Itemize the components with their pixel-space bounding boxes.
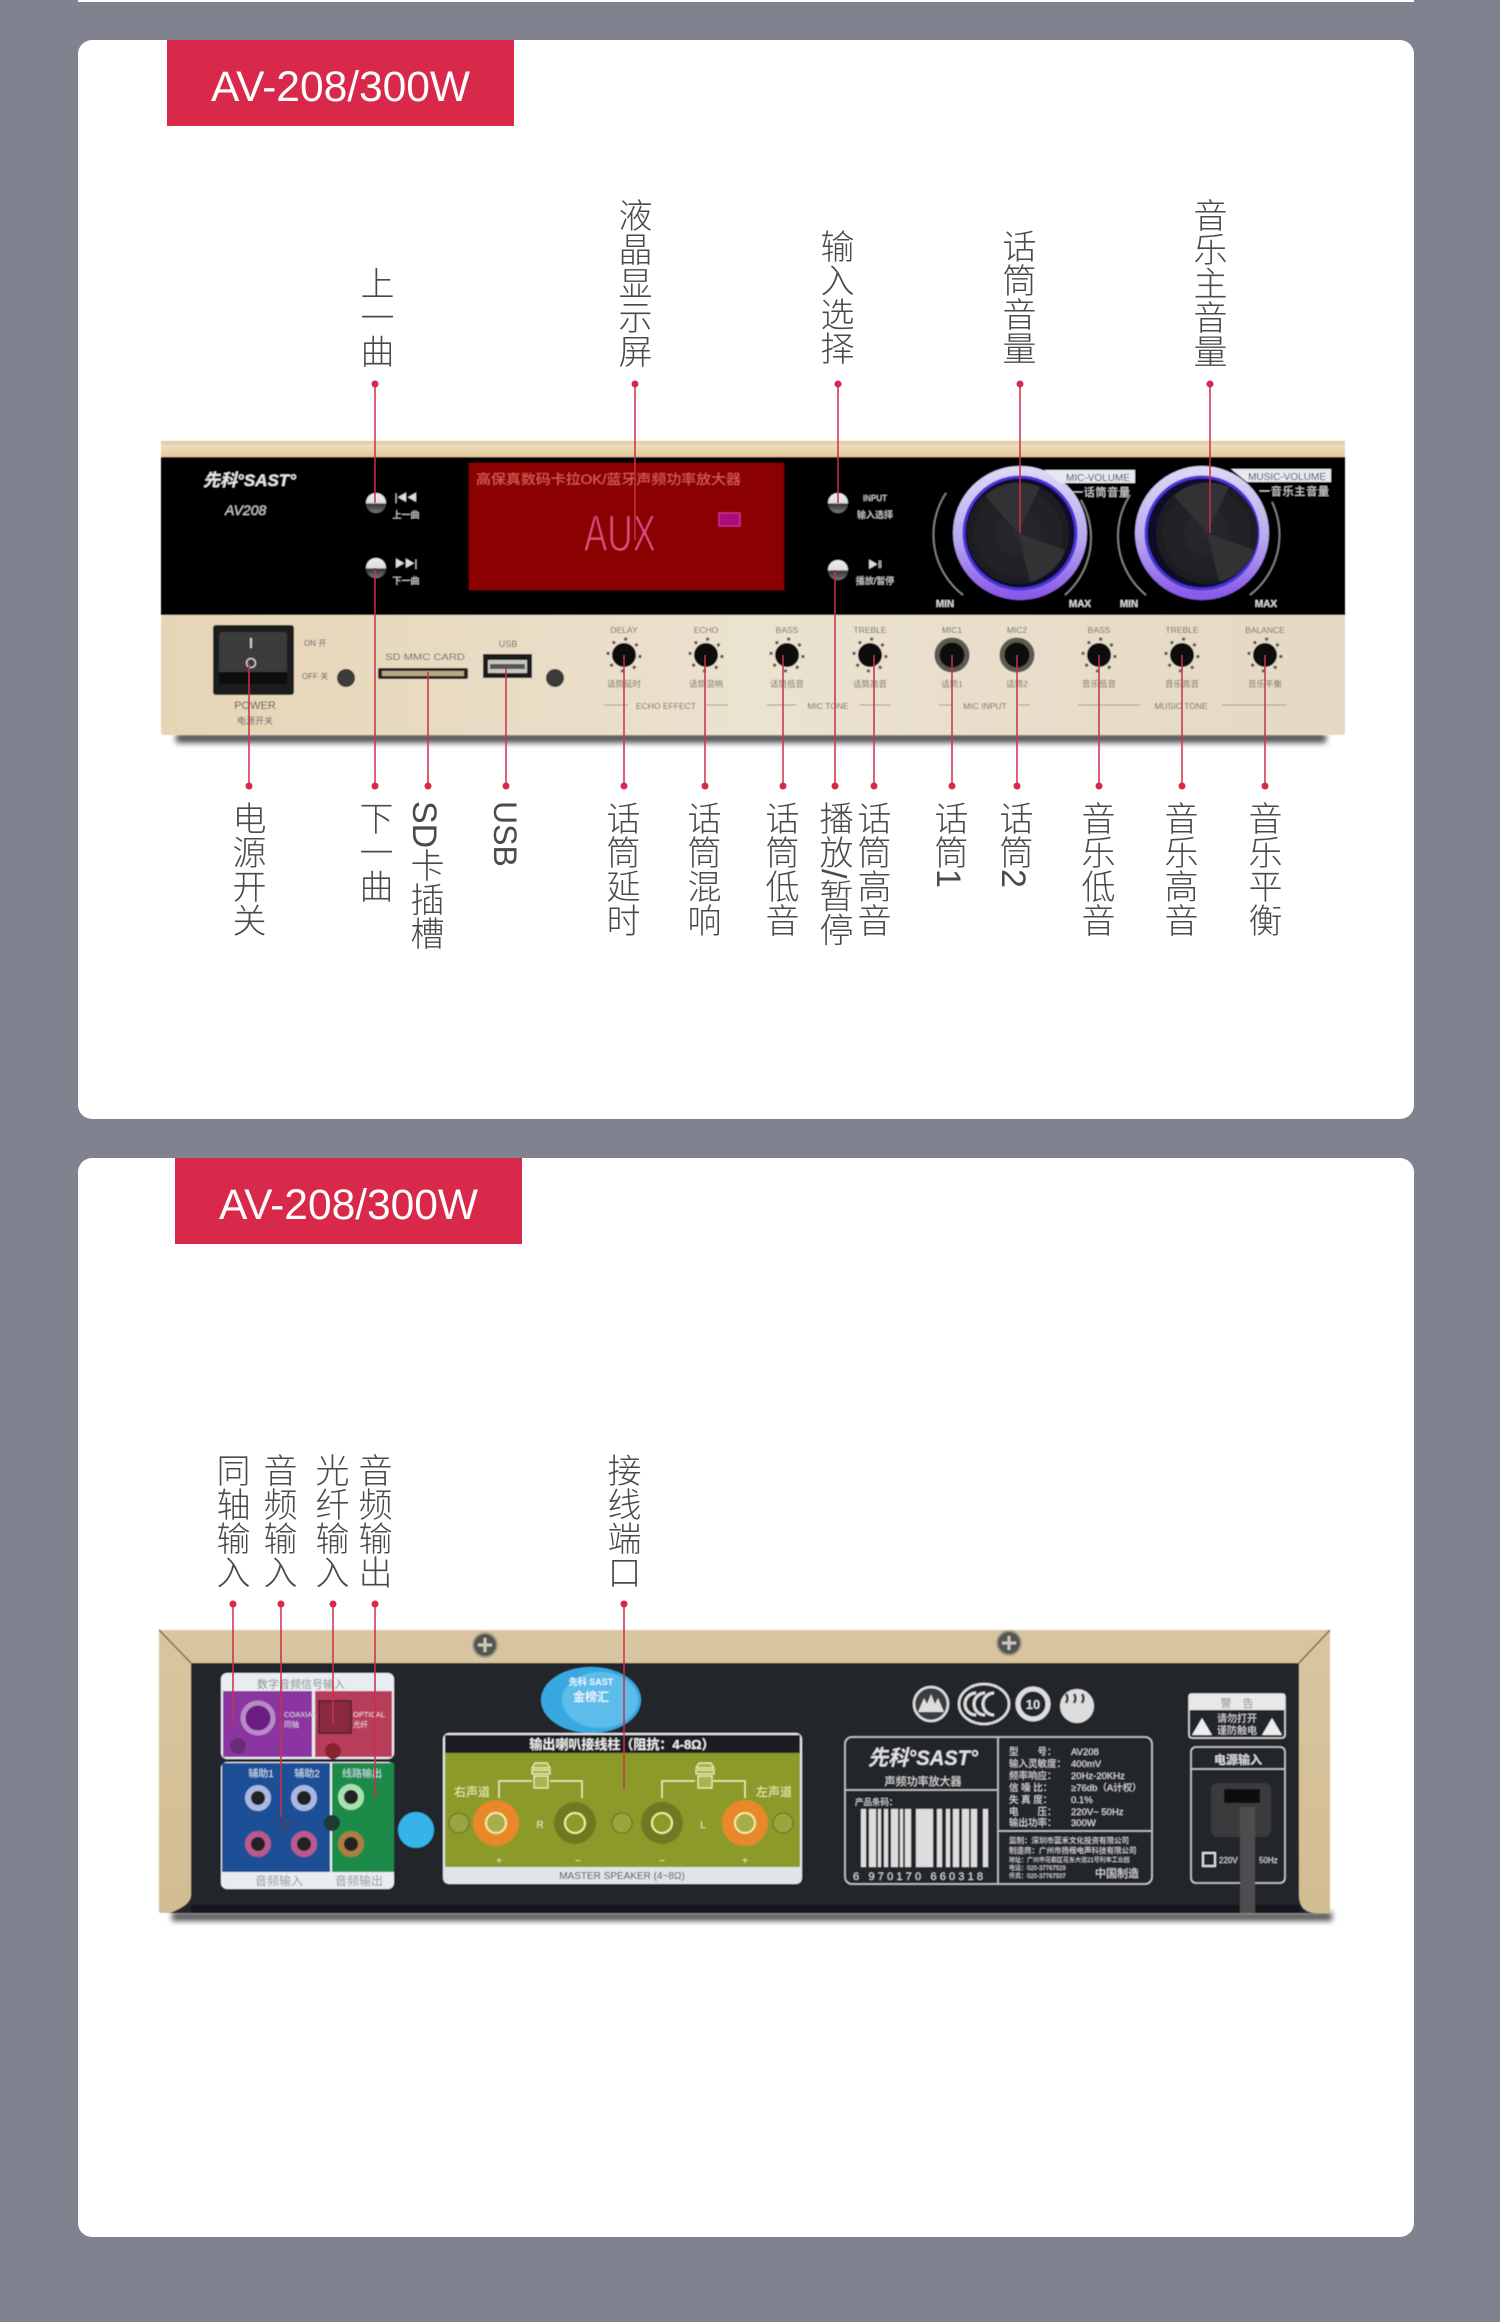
left buttons: ▶▶| bbox=[395, 558, 417, 570]
product label: 型 号： bbox=[1009, 1747, 1057, 1758]
microphone jacks bbox=[937, 640, 1032, 670]
lower gold panel bbox=[161, 615, 1345, 735]
panel legends: DELAY bbox=[610, 625, 638, 635]
music volume knob: MUSIC-VOLUME bbox=[1248, 472, 1326, 483]
power input: 电源输入 bbox=[1214, 1752, 1262, 1767]
leader line: 接线端口 bbox=[620, 1600, 628, 1788]
product label: 信 噪 比： bbox=[1009, 1782, 1052, 1794]
brand logo: 先科°SAST° bbox=[203, 471, 296, 490]
leader line: 音频输入 bbox=[278, 1600, 284, 1817]
leader line: 话筒低音 bbox=[780, 655, 786, 790]
label: USB: USB bbox=[487, 801, 523, 867]
speaker terminal panel: + bbox=[496, 1856, 502, 1867]
leader line: 话筒混响 bbox=[702, 655, 708, 790]
left buttons: 下一曲 bbox=[392, 576, 420, 586]
product label: 中国制造 bbox=[1095, 1866, 1139, 1880]
label: 话筒1: 话筒1 bbox=[929, 801, 967, 888]
panel legends: 话筒1 bbox=[941, 679, 963, 689]
label: 上一曲: 上一曲 bbox=[355, 266, 393, 368]
warning label: 请勿打开 bbox=[1217, 1712, 1257, 1725]
leader line: 音乐平衡 bbox=[1262, 655, 1268, 790]
case screws bbox=[473, 1631, 1021, 1657]
panel legends bbox=[607, 625, 1285, 711]
panel legends: 音乐平衡 bbox=[1248, 679, 1282, 689]
speaker terminal panel: L bbox=[700, 1820, 706, 1831]
product label: AV208 bbox=[1071, 1747, 1099, 1758]
LCD display: 高保真数码卡拉OK/蓝牙声频功率放大器 bbox=[476, 471, 742, 487]
label: 播放/暂停: 播放/暂停 bbox=[814, 801, 852, 946]
product label: 300W bbox=[1071, 1818, 1096, 1829]
power switch bbox=[213, 625, 355, 726]
rear shadow bbox=[172, 1912, 1332, 1921]
product label: 制造商：广州市扬程电声科技有限公司 bbox=[1009, 1845, 1136, 1855]
product label: 失 真 度： bbox=[1009, 1794, 1052, 1806]
panel legends: MIC INPUT bbox=[963, 701, 1007, 711]
power switch: POWER bbox=[234, 700, 276, 712]
tone knobs bbox=[608, 639, 1281, 671]
label: 下一曲: 下一曲 bbox=[354, 801, 392, 903]
panel legends: ECHO EFFECT bbox=[636, 701, 696, 711]
left buttons: 上一曲 bbox=[392, 510, 420, 520]
black fascia bbox=[161, 457, 1345, 615]
product label: 220V~ 50Hz bbox=[1071, 1807, 1124, 1818]
product label bbox=[845, 1737, 1152, 1884]
warning label bbox=[1189, 1694, 1285, 1738]
left buttons: 播放/暂停 bbox=[856, 575, 894, 586]
panel legends: MUSIC TONE bbox=[1154, 701, 1208, 711]
product label: 产品条码： bbox=[855, 1797, 898, 1807]
power switch: 电源开关 bbox=[237, 715, 273, 726]
warning label: 谨防触电 bbox=[1217, 1724, 1257, 1737]
leader line: 话筒延时 bbox=[620, 655, 628, 790]
panel: rear view card bbox=[78, 1158, 1414, 2237]
left buttons bbox=[366, 492, 894, 586]
product label: 输入灵敏度： bbox=[1009, 1758, 1066, 1770]
speaker terminal panel: − bbox=[659, 1856, 665, 1867]
label: 同轴输入: 同轴输入 bbox=[211, 1453, 249, 1589]
panel legends: ECHO bbox=[694, 625, 719, 635]
panel: front view card bbox=[78, 40, 1414, 1119]
heading tab: front model: AV-208/300W bbox=[211, 64, 470, 111]
mic volume knob: MAX bbox=[1069, 599, 1091, 610]
leader line: 音乐主音量 bbox=[1206, 380, 1214, 533]
leader line: 音乐低音 bbox=[1096, 655, 1102, 790]
brand logo: AV208 bbox=[224, 502, 266, 518]
audio input output panel: 线路输出 bbox=[342, 1767, 382, 1780]
heading tab: front model bbox=[167, 40, 514, 126]
gold frame bbox=[159, 1630, 1330, 1913]
leader line: 话筒音量 bbox=[1016, 380, 1024, 533]
panel legends: BALANCE bbox=[1245, 625, 1285, 635]
audio input output panel: 辅助1 bbox=[248, 1767, 274, 1780]
heading tab: rear model bbox=[175, 1158, 522, 1244]
digital input panel: OPTICAL bbox=[353, 1710, 385, 1719]
label: 音频输入: 音频输入 bbox=[258, 1453, 296, 1589]
left buttons: |◀◀ bbox=[395, 492, 417, 504]
product label: 声频功率放大器 bbox=[884, 1774, 962, 1788]
cyan seal bbox=[398, 1812, 434, 1848]
label: 音乐高音: 音乐高音 bbox=[1159, 801, 1197, 937]
panel legends: 音乐高音 bbox=[1165, 679, 1199, 689]
panel legends: TREBLE bbox=[853, 625, 887, 635]
certification marks: 10 bbox=[1026, 1697, 1040, 1712]
speaker terminal panel: 左声道 bbox=[756, 1784, 792, 1799]
leader line: 上一曲 bbox=[372, 380, 378, 503]
label: 音乐低音: 音乐低音 bbox=[1076, 801, 1114, 937]
label: 话筒音量: 话筒音量 bbox=[997, 229, 1035, 365]
leader line: 光纤输入 bbox=[330, 1600, 336, 1723]
product label: 地址：广州市花都区花东大道21号利丰工业园 bbox=[1009, 1856, 1130, 1864]
speaker terminal panel: − bbox=[575, 1856, 581, 1867]
left buttons: ▶‖ bbox=[868, 559, 882, 571]
label: 话筒低音: 话筒低音 bbox=[760, 801, 798, 937]
digital input panel: 同轴 bbox=[284, 1719, 299, 1729]
certification marks bbox=[914, 1684, 1094, 1724]
panel legends: 话筒2 bbox=[1006, 679, 1028, 689]
music volume knob: 一音乐主音量 bbox=[1259, 484, 1329, 498]
product label: 0.1% bbox=[1071, 1795, 1093, 1806]
panel legends: 话筒延时 bbox=[607, 679, 641, 689]
SD card slot: SD MMC CARD bbox=[385, 652, 466, 662]
panel legends: BASS bbox=[776, 625, 799, 635]
label: 接线端口: 接线端口 bbox=[602, 1453, 640, 1589]
speaker terminal panel: 输出喇叭接线柱（阻抗：4-8Ω） bbox=[529, 1737, 715, 1752]
warranty sticker: 先科 SAST bbox=[569, 1676, 614, 1687]
product label: 20Hz-20KHz bbox=[1071, 1771, 1125, 1782]
mic volume knob: 一话筒音量 bbox=[1072, 485, 1130, 499]
label: 音乐平衡: 音乐平衡 bbox=[1243, 801, 1281, 937]
brand logo bbox=[203, 471, 296, 518]
product label: 监制：深圳市蓝禾文化投资有限公司 bbox=[1009, 1835, 1129, 1845]
warning label: 警 告 bbox=[1220, 1696, 1254, 1710]
label: 话筒延时: 话筒延时 bbox=[601, 801, 639, 937]
product label: 电 压： bbox=[1009, 1806, 1057, 1818]
label: 输入选择: 输入选择 bbox=[815, 229, 853, 365]
audio input output panel bbox=[221, 1762, 394, 1889]
power input: 220V bbox=[1219, 1856, 1238, 1865]
leader line: 播放/暂停 bbox=[832, 570, 838, 790]
SD card slot bbox=[378, 652, 468, 679]
top gold band bbox=[161, 441, 1345, 457]
leader line: 音乐高音 bbox=[1178, 655, 1186, 790]
USB port bbox=[483, 639, 564, 687]
digital input panel: 数字音频信号输入 bbox=[257, 1677, 345, 1691]
panel legends: MIC TONE bbox=[807, 701, 849, 711]
left buttons: 输入选择 bbox=[857, 509, 893, 520]
digital input panel: COAXIAL bbox=[284, 1710, 317, 1719]
heading tab: rear model: AV-208/300W bbox=[219, 1182, 478, 1229]
label: 话筒混响: 话筒混响 bbox=[682, 801, 720, 937]
label: 电源开关: 电源开关 bbox=[227, 801, 265, 937]
music volume knob: MAX bbox=[1255, 599, 1277, 610]
LCD display bbox=[469, 463, 784, 590]
product label: 频率响应： bbox=[1009, 1770, 1057, 1782]
power switch: ON 开 bbox=[304, 639, 326, 648]
leader line: 话筒1 bbox=[948, 655, 956, 790]
leader line: 音频输出 bbox=[372, 1600, 378, 1798]
mic volume knob bbox=[933, 470, 1135, 610]
previous panel edge bbox=[78, 0, 1414, 2]
leader line: 同轴输入 bbox=[230, 1600, 236, 1725]
label: 液晶显示屏: 液晶显示屏 bbox=[613, 198, 651, 368]
leader line: SD卡插槽 bbox=[424, 672, 432, 790]
speaker terminal panel: 右声道 bbox=[454, 1784, 490, 1799]
label: 音频输出: 音频输出 bbox=[353, 1453, 391, 1589]
product label: 电话：020-37767529 bbox=[1009, 1864, 1066, 1872]
panel legends: BASS bbox=[1088, 625, 1111, 635]
panel legends: 音乐低音 bbox=[1082, 679, 1116, 689]
rear amplifier bbox=[159, 1630, 1332, 1921]
leader line: USB bbox=[502, 668, 510, 790]
product label: 输出功率： bbox=[1009, 1817, 1057, 1829]
USB port: USB bbox=[499, 639, 517, 649]
panel legends: 话筒高音 bbox=[853, 679, 887, 689]
label: 话筒高音: 话筒高音 bbox=[852, 801, 890, 937]
digital input panel: 光纤 bbox=[353, 1719, 368, 1729]
label: SD卡插槽: SD卡插槽 bbox=[405, 801, 443, 950]
label: 光纤输入: 光纤输入 bbox=[310, 1453, 348, 1589]
music volume knob: MIN bbox=[1120, 599, 1138, 610]
audio input output panel: 音频输入 bbox=[255, 1873, 303, 1888]
label: 话筒2: 话筒2 bbox=[994, 801, 1032, 888]
panel legends: 话筒低音 bbox=[770, 679, 804, 689]
LCD display: AUX bbox=[584, 505, 656, 563]
audio input output panel: 辅助2 bbox=[294, 1767, 320, 1780]
product label: 先科°SAST° bbox=[868, 1747, 979, 1770]
warranty sticker: 金榜汇 bbox=[573, 1689, 609, 1704]
mic volume knob: MIC-VOLUME bbox=[1066, 473, 1130, 484]
leader line: 话筒2 bbox=[1014, 655, 1020, 790]
audio input output panel: 音频输出 bbox=[335, 1873, 383, 1888]
power input bbox=[1191, 1747, 1285, 1913]
speaker terminal panel: R bbox=[536, 1820, 544, 1831]
power input: 50Hz bbox=[1259, 1856, 1278, 1865]
product label: 400mV bbox=[1071, 1759, 1102, 1770]
leader line: 电源开关 bbox=[246, 663, 252, 790]
left buttons: INPUT bbox=[863, 494, 887, 503]
speaker terminal panel bbox=[443, 1733, 802, 1884]
warranty sticker bbox=[541, 1667, 641, 1733]
front amplifier bbox=[161, 441, 1345, 743]
music volume knob bbox=[1118, 469, 1331, 610]
frame bevels bbox=[159, 1630, 1330, 1663]
digital input panel bbox=[221, 1673, 394, 1759]
panel legends: MIC2 bbox=[1007, 625, 1027, 635]
mic volume knob: MIN bbox=[936, 599, 954, 610]
power switch: OFF 关 bbox=[302, 671, 328, 681]
amplifier shadow bbox=[176, 733, 1326, 743]
leader line: 话筒高音 bbox=[870, 655, 878, 790]
speaker terminal panel: MASTER SPEAKER (4~8Ω) bbox=[559, 1871, 685, 1882]
speaker terminal panel: + bbox=[742, 1856, 748, 1867]
leader line: 下一曲 bbox=[372, 568, 378, 790]
panel legends: 话筒混响 bbox=[689, 679, 723, 689]
black back plate bbox=[170, 1663, 1317, 1913]
panel legends: MIC1 bbox=[942, 625, 962, 635]
panel legends: TREBLE bbox=[1165, 625, 1199, 635]
label: 音乐主音量: 音乐主音量 bbox=[1188, 198, 1226, 368]
product label: 传真：020-37767507 bbox=[1009, 1872, 1066, 1880]
leader line: 液晶显示屏 bbox=[632, 380, 638, 540]
product label: ≥76db（A计权） bbox=[1071, 1782, 1142, 1794]
product label: 6 970170 660318 bbox=[853, 1871, 983, 1883]
leader line: 输入选择 bbox=[834, 380, 842, 503]
